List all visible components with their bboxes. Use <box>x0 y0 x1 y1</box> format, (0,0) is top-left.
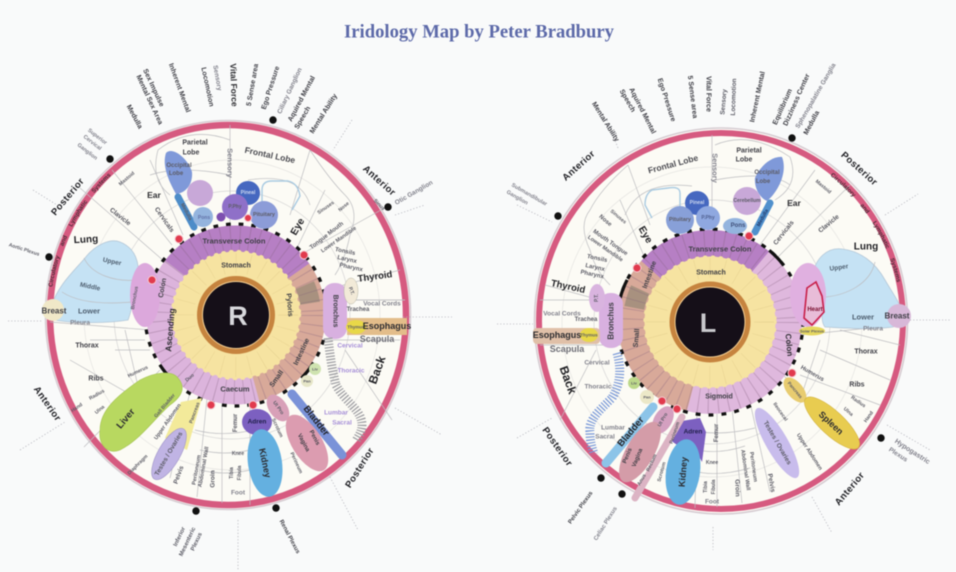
left eye outer labels: Posterior <box>838 150 880 188</box>
left eye inner labels: Medulla <box>756 208 770 228</box>
left eye outer labels: Anterior <box>833 470 867 508</box>
left eye inner labels: Lower Mandible <box>586 235 624 263</box>
left eye bladder and reproductive <box>606 403 682 498</box>
left eye inner labels: Humerus <box>799 365 825 383</box>
left eye inner labels: Thorax <box>854 348 878 356</box>
left eye iris <box>579 191 841 453</box>
left eye inner labels: Pineal <box>690 200 705 206</box>
left eye inner labels: Hand <box>863 410 875 424</box>
left eye inner labels: Penis <box>622 447 634 465</box>
panel: right eye map <box>8 62 452 570</box>
right eye zone grid lines <box>50 125 405 505</box>
right eye inner labels: Ear <box>147 190 162 200</box>
left eye zone grid lines <box>540 135 900 508</box>
right eye inner labels: Pleura <box>70 320 90 326</box>
left eye outer labels <box>505 62 931 542</box>
right eye inner labels: Gall Bladder <box>153 393 177 419</box>
left eye inner labels: Pelvis <box>766 473 776 493</box>
left eye inner labels: Ut Pro <box>657 412 669 428</box>
left eye outer labels: 5 Sense area <box>686 75 698 119</box>
right eye inner labels: Colon <box>158 278 168 298</box>
right eye inner labels: Diaphragm <box>127 453 150 476</box>
right eye inner labels: Pituitary <box>253 212 276 218</box>
right eye inner labels: Clavicle <box>108 207 132 228</box>
right eye iris <box>108 187 364 443</box>
right eye inner labels: Occipital <box>166 163 192 169</box>
left eye inner labels: Transverse Colon <box>689 244 752 254</box>
left eye inner labels <box>533 148 910 506</box>
left eye spleen and pancreas <box>779 373 867 456</box>
left eye inner labels: Mouth Tongue <box>592 229 629 258</box>
left eye inner labels: Spleen <box>817 409 845 437</box>
right eye inner labels: Vagina <box>296 433 310 454</box>
left eye inner labels: Mastoid <box>814 179 832 195</box>
left eye inner labels: Cervicals <box>772 219 796 247</box>
left eye inner labels: Parietal <box>736 148 762 154</box>
left eye inner labels: Heart <box>807 307 823 313</box>
right eye inner labels: Pyloris <box>284 293 294 317</box>
right eye inner labels: Bronchus <box>130 286 140 310</box>
left eye inner labels: Colon <box>784 333 794 357</box>
right eye inner labels: Tonsils <box>334 247 356 257</box>
left eye guide dotted lines <box>497 120 950 550</box>
right eye inner labels: Testes / Ovaries <box>154 431 185 477</box>
left eye inner labels: Small <box>633 328 641 348</box>
left eye inner labels: Fibula <box>711 479 717 494</box>
left eye inner labels: Back <box>557 364 580 396</box>
right eye lung <box>52 241 138 323</box>
right eye inner labels: Scapula <box>360 334 395 344</box>
left eye inner labels: Scapula <box>550 344 585 354</box>
right eye inner labels: Back <box>366 354 389 386</box>
right eye pink outer ring <box>46 120 410 510</box>
right eye outer labels: Otic Ganglion <box>394 179 434 207</box>
right eye inner labels: Parietal <box>182 140 208 146</box>
right eye inner labels: Sinuses <box>316 200 336 216</box>
right eye outer labels: Mental Ability <box>309 93 339 135</box>
right eye outer labels: Vital Force <box>228 63 240 107</box>
left eye inner labels: Tibia <box>703 481 709 493</box>
right eye inner labels: Ulna <box>94 404 106 416</box>
right eye outer labels: Aortic Plexus <box>8 242 40 258</box>
right eye inner labels: Larynx <box>337 255 358 265</box>
left eye inner labels: Esophagus <box>533 330 581 340</box>
right eye inner labels: Penis <box>308 430 321 447</box>
right eye inner labels: Stomach <box>221 262 251 270</box>
left eye red reflex markers <box>633 232 796 413</box>
right eye inner labels: Mastoid <box>118 171 136 187</box>
right eye liver and pancreas nodes <box>301 363 321 387</box>
right eye inner labels: Ut Pro <box>271 400 285 416</box>
right eye outer labels: Superior <box>86 128 108 147</box>
right eye inner labels: Ascending <box>163 308 177 352</box>
right eye inner labels: Liver <box>114 407 138 431</box>
left eye inner labels: Ribs <box>849 382 865 388</box>
right eye inner labels: Thorax <box>75 342 99 350</box>
right eye inner labels: Intestine <box>293 337 311 367</box>
right eye inner labels: Ribs <box>88 376 104 382</box>
right eye outer labels: Speech <box>294 105 312 131</box>
right eye brain organs <box>165 151 278 229</box>
left eye outer labels: Mental Ability <box>590 101 620 143</box>
right eye inner labels: Abdominal Wall <box>197 446 211 488</box>
left eye inner labels: Anus <box>636 473 648 487</box>
right eye inner labels: Hand <box>70 402 84 414</box>
left eye inner labels: Vagina <box>632 447 645 468</box>
right eye outer labels: Medulla <box>125 104 143 130</box>
right eye inner labels: Groin <box>210 470 216 488</box>
right eye inner labels: Tongue Mouth <box>309 221 345 251</box>
left eye inner labels: Ear <box>787 198 802 208</box>
right eye liver <box>100 373 182 451</box>
right eye pancreas and testes <box>145 398 202 485</box>
left eye inner labels: Solar Plexus <box>800 328 825 334</box>
left eye outer labels: Aquired Mental <box>627 87 657 135</box>
left eye inner labels: P.Phy <box>701 215 715 221</box>
right eye inner labels: Thoracic <box>337 368 365 374</box>
left eye testes ovaries <box>747 403 807 483</box>
right eye inner labels: Vocal Cords <box>363 300 401 308</box>
right eye ring text: Circulatory and Lymphatic Systems <box>48 173 111 288</box>
title: Iridology Map by Peter Bradbury <box>344 22 614 42</box>
left eye ring text: Circulatory and Lymphatic Systems <box>830 172 900 283</box>
right eye inner labels <box>42 140 411 496</box>
left eye liver and pancreas nodes <box>628 377 654 404</box>
right eye inner labels: Transverse Colon <box>203 236 266 246</box>
left eye inner labels: Radius <box>849 395 867 409</box>
right eye bronchus, thyroid, esophagus <box>323 278 407 339</box>
right eye inner labels: Small <box>269 369 285 389</box>
left eye inner labels: Pleura <box>863 326 883 332</box>
left eye inner labels: Lumbar <box>601 424 625 432</box>
left eye inner labels: Pons <box>731 223 746 229</box>
left eye brain organs <box>666 157 784 234</box>
left eye inner labels: Pancreas <box>787 381 804 400</box>
left eye inner labels: Bronchus <box>606 302 616 340</box>
left eye inner labels: Bladder <box>615 415 647 449</box>
left eye inner labels: Thymus <box>580 332 598 338</box>
left eye inner labels: Abdominal Wall <box>739 449 751 491</box>
right eye bladder and reproductive <box>262 391 342 478</box>
right eye outer labels: Ego Pressure <box>261 65 281 111</box>
left eye pink outer ring <box>534 128 908 514</box>
right eye outer labels: Sex Impulse <box>141 68 165 108</box>
left eye inner labels: Pan <box>643 394 651 400</box>
right eye outer labels: Sinus <box>372 198 386 212</box>
right eye inner labels: Fibula <box>237 465 243 480</box>
right eye inner labels: Upper Abdomen <box>153 402 183 441</box>
right eye inner labels: Nose <box>337 201 351 213</box>
right eye inner labels: P.Phy <box>228 204 242 210</box>
left eye outer labels: Posterior <box>539 425 575 469</box>
left eye inner labels: Sensory <box>710 153 720 184</box>
right eye inner labels: Caecum <box>220 384 250 394</box>
left eye outer labels: Medulla <box>803 110 821 136</box>
left eye inner labels: Larynx <box>585 263 606 273</box>
right eye inner labels: Lung <box>74 234 98 246</box>
right eye inner labels: Foot <box>231 490 246 496</box>
right eye outer labels <box>8 62 434 557</box>
right eye inner labels: Peritoneum <box>191 454 203 485</box>
right eye inner labels: Adren <box>248 418 266 426</box>
right eye outer labels: Mental Sex Area <box>134 74 164 126</box>
left eye inner labels: Breast <box>885 312 910 320</box>
right eye outer labels: Mesenteric <box>179 526 198 557</box>
left eye pupil letter: L <box>700 308 716 338</box>
right eye inner labels: Medulla <box>179 202 193 222</box>
right eye inner labels: Sensory <box>226 148 234 179</box>
right eye inner labels: Middle <box>79 281 101 293</box>
right eye outer labels: Inherent Mental <box>167 62 191 114</box>
right eye inner labels: Pelvis <box>172 465 186 485</box>
left eye inner labels: Vocal Cords <box>543 310 581 318</box>
left eye inner labels: Lobe <box>736 156 752 164</box>
right eye pupil letter: R <box>228 301 248 331</box>
right eye inner labels: Lumbar <box>324 410 348 416</box>
left eye inner labels: Thyroid <box>550 278 586 296</box>
right eye inner labels: Breast <box>42 306 67 316</box>
right eye ganglion dots <box>45 116 392 515</box>
right eye outer labels: Locomotion <box>199 67 215 107</box>
left eye inner labels: Adren <box>684 428 702 436</box>
left eye inner labels: Eye <box>636 225 654 246</box>
panel: left eye map <box>496 62 950 550</box>
left eye inner labels: Cerebellum <box>733 198 761 204</box>
right eye outer labels: Ganglion <box>76 142 99 162</box>
left eye inner labels: Thoracic <box>584 384 612 390</box>
right eye inner labels: Radius <box>88 388 106 402</box>
right eye inner labels: Bronchus <box>332 295 338 327</box>
left eye outer labels: Plexus <box>887 446 909 464</box>
left eye inner labels: Sinuses <box>609 209 627 226</box>
left eye heart <box>790 263 826 336</box>
left eye breast <box>887 304 911 328</box>
right eye inner labels: Humerus <box>127 365 149 379</box>
right eye inner labels: Pancreas <box>188 401 202 424</box>
right eye inner labels: Lobe <box>183 150 199 156</box>
left eye inner labels: Intestine <box>642 260 658 290</box>
left eye inner labels: Ileocecal <box>771 402 789 423</box>
left eye inner labels: Femur <box>714 423 720 442</box>
left eye inner labels: Kidney <box>677 457 689 487</box>
left eye inner labels: Scrotum <box>656 461 668 483</box>
right eye inner labels: Bladder <box>301 404 331 439</box>
right eye inner labels: Trachea <box>347 307 370 313</box>
left eye outer labels: Anterior <box>560 148 598 184</box>
right eye outer labels: Anterior <box>360 163 398 199</box>
right eye outer labels: Plexus <box>190 531 204 552</box>
left eye inner labels: Upper <box>829 263 849 273</box>
right eye inner labels: Frontal Lobe <box>244 145 296 165</box>
left eye outer labels: Ganglion <box>505 189 529 207</box>
left eye inner labels: Trachea <box>575 317 598 323</box>
right eye inner labels: Tibia <box>229 467 235 479</box>
left eye inner labels: Frontal Lobe <box>647 152 699 175</box>
right eye inner labels: Liv <box>312 366 319 372</box>
right eye inner labels: Pineal <box>241 190 256 196</box>
left eye outer labels: Sensory <box>719 89 729 115</box>
left eye spine <box>590 353 620 454</box>
left eye inner labels: Liv <box>631 380 638 386</box>
left eye outer labels: Sphenopalatine Ganglia <box>794 62 838 130</box>
right eye inner labels: Esophagus <box>363 321 411 331</box>
right eye inner labels: Thymus <box>347 324 365 330</box>
right eye inner labels: Pharynx <box>339 263 364 274</box>
right eye outer labels: Anterior <box>31 384 63 424</box>
left eye outer labels: Celiac Plexus <box>593 505 619 542</box>
right eye outer labels: Aquired Mental <box>287 75 317 123</box>
left eye inner labels: Sacral <box>595 434 615 440</box>
right eye outer labels: Posterior <box>343 446 377 490</box>
right eye inner labels: Perineum <box>288 451 304 475</box>
left eye outer labels: Vital Force <box>704 76 712 112</box>
right eye guide dotted lines <box>8 120 452 570</box>
left eye kidney and adrenal <box>662 418 706 507</box>
right eye inner labels: Cervicals <box>153 206 175 234</box>
right eye outer labels: Sensory <box>211 65 223 92</box>
left eye inner labels: Knee <box>706 460 718 466</box>
right eye outer labels: Cervical <box>82 134 103 152</box>
right eye inner labels: P.T. <box>347 286 355 296</box>
left eye lung <box>813 249 902 329</box>
left eye outer labels: Ego Pressure <box>656 77 676 123</box>
right eye red reflex markers <box>148 214 308 409</box>
left eye inner labels: Lobe <box>756 179 771 185</box>
left eye outer labels: Pelvic Plexus <box>568 490 595 525</box>
left eye inner labels: P.T. <box>594 293 600 302</box>
left eye outer labels: Speech <box>618 88 636 114</box>
right eye inner labels: Duo <box>184 373 196 383</box>
left eye inner labels: Upper Abdomen <box>795 433 823 472</box>
left eye inner labels: Occipital <box>754 170 780 176</box>
right eye inner labels: Pan <box>303 378 311 384</box>
left eye inner labels: Tonsils <box>586 254 608 264</box>
right eye kidney and adrenal <box>242 409 287 499</box>
left eye outer labels: Hypogastric <box>893 438 931 466</box>
right eye inner labels: Lower <box>78 306 100 316</box>
left eye inner labels: Clavicle <box>817 213 841 235</box>
left eye inner labels: Pituitary <box>669 217 692 223</box>
right eye inner labels: Cervical <box>337 342 363 350</box>
left eye inner labels: Groin <box>733 479 741 497</box>
left eye inner labels: Foot <box>705 498 720 506</box>
left eye ganglion dots <box>554 134 885 498</box>
left eye outer labels: Equilibrium <box>772 88 794 126</box>
right eye inner labels: Upper <box>102 257 122 267</box>
left eye inner labels: Stomach <box>696 270 726 276</box>
right eye inner labels: Femur <box>233 413 239 432</box>
left eye inner labels: Peritoneum <box>748 452 758 483</box>
left eye inner labels: Cervical <box>584 360 610 366</box>
right eye inner labels: Eye <box>289 216 307 237</box>
left eye bronchus, thyroid, esophagus <box>533 284 623 348</box>
left eye outer labels: Locomotion <box>730 78 738 116</box>
right eye outer labels: 5 Sense area <box>246 63 260 107</box>
left eye outer labels: Inherent Mental <box>749 71 767 123</box>
right eye inner labels: Thyroid <box>357 269 393 285</box>
left eye inner labels: Nose <box>597 214 613 228</box>
left eye outer labels: Dizziness Center <box>782 73 812 127</box>
right eye outer labels: Inferior <box>173 526 187 548</box>
right eye inner labels: Knee <box>232 451 244 457</box>
right eye outer labels: Ciliary Ganglion <box>276 67 304 115</box>
right eye spine <box>328 338 362 441</box>
right eye inner labels: Lower Mandible <box>320 226 358 254</box>
left eye inner labels: Rectum <box>645 453 659 473</box>
left eye outer labels: Submandibular <box>510 182 549 208</box>
left eye inner labels: Perineum <box>669 421 682 445</box>
right eye inner labels: Kidney <box>257 447 273 479</box>
left eye inner labels: Lower <box>852 312 874 322</box>
right eye breast and bronchial blob <box>42 263 160 327</box>
right eye inner labels: Scrotum <box>270 418 284 439</box>
right eye inner labels: Pons <box>198 215 210 221</box>
right eye outer labels: Renal Plexus <box>278 519 301 555</box>
right eye inner labels: Sacral <box>332 420 352 426</box>
left eye inner labels: Testes / Ovaries <box>762 420 793 466</box>
left eye inner labels: Pharynx <box>580 270 605 281</box>
left eye inner labels: Sigmoid <box>705 394 733 400</box>
left eye inner labels: Ulna <box>842 406 854 418</box>
right eye inner labels: Lobe <box>169 171 184 177</box>
left eye inner labels: Lung <box>854 242 878 252</box>
right eye outer labels: Posterior <box>49 176 87 218</box>
